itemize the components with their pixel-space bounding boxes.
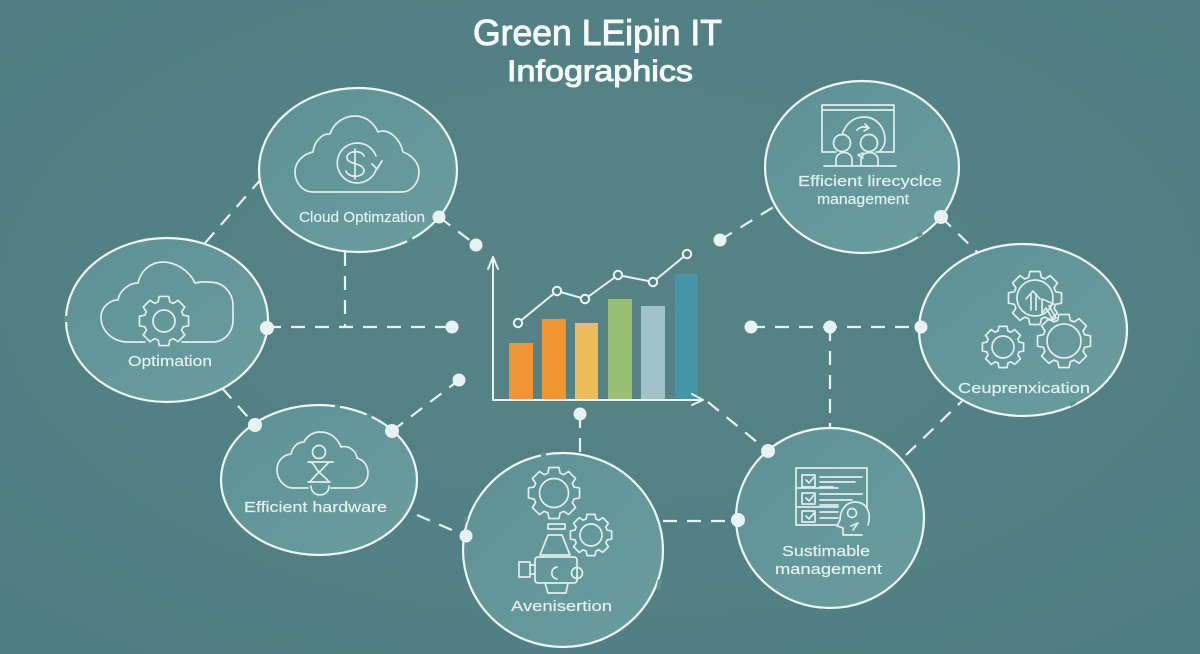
axes (488, 257, 703, 405)
label: Cloud Optimzation: Cloud Optimzation (299, 209, 425, 226)
panel: cloud optimization (259, 88, 457, 252)
label: Avenisertion: Avenisertion (511, 598, 612, 615)
label: management: management (817, 191, 910, 208)
trend line (514, 250, 691, 327)
chart: bars and trend line (488, 250, 703, 405)
panel: avenisertion (463, 453, 663, 647)
title (473, 12, 722, 88)
icon: screen with two people (822, 105, 896, 166)
label: Optimation: Optimation (128, 353, 212, 370)
icon: three gears with arrow (982, 271, 1091, 368)
label: management: management (775, 561, 883, 578)
label: Efficient hardware: Efficient hardware (244, 499, 387, 516)
bars (509, 274, 698, 400)
icon: cloud with bulb (277, 432, 368, 495)
icon: cloud with gear (101, 262, 233, 346)
icon: checklist and head (796, 468, 869, 535)
title: Infographics (507, 55, 693, 88)
panel: efficient hardware (221, 405, 417, 555)
label: Sustimable: Sustimable (782, 543, 870, 560)
panel: efficient lifecycle management (765, 81, 959, 253)
icon: cloud with dollar (295, 116, 419, 192)
title: Green LEipin IT (473, 12, 722, 53)
panel: sustimable management (736, 428, 924, 608)
connector dots (248, 210, 948, 542)
label: Ceuprenxication: Ceuprenxication (958, 380, 1090, 397)
panel: optimation (66, 238, 268, 402)
label: Efficient lirecyclce: Efficient lirecyclce (798, 173, 942, 190)
icon: gears and machine (519, 467, 612, 593)
panel: ceuprenxication (919, 244, 1127, 416)
dashed connectors (205, 178, 977, 536)
